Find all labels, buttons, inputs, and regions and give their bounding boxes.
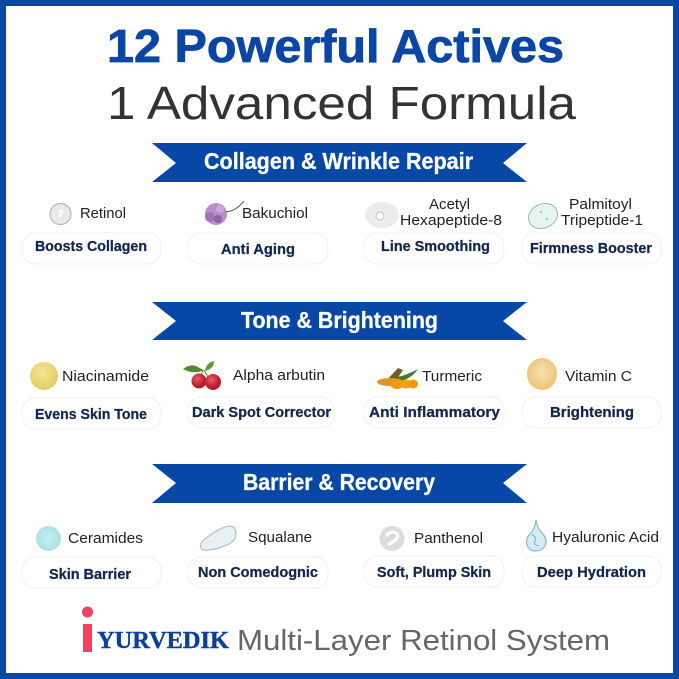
panel: Alpha arbutin: Dark Spot Corrector (192, 405, 331, 421)
footer brand line: Multi-Layer Retinol System (237, 625, 610, 657)
banner: Tone & Brightening (152, 302, 527, 340)
panel: Turmeric: Turmeric (422, 369, 482, 385)
panel: Niacinamide (22, 362, 161, 429)
panel: Panthenol: Panthenol (414, 531, 483, 547)
panel: Alpha arbutin (183, 361, 334, 428)
banner: Collagen & Wrinkle Repair: Collagen & Wrinkle Repair (204, 148, 473, 174)
icon: peptide gel (365, 202, 399, 228)
panel: Squalane: Squalane (248, 530, 312, 546)
icon: squalane smear (200, 526, 236, 550)
icon: ceramide drop (36, 526, 61, 551)
icon: turmeric root (377, 368, 418, 389)
icon: retinol drop (50, 204, 71, 224)
panel: Hyaluronic Acid: Hyaluronic Acid (552, 530, 659, 546)
panel: Niacinamide: Niacinamide (62, 369, 149, 385)
title: 12 Powerful Actives (107, 20, 564, 72)
panel: Retinol: Boosts Collagen (35, 239, 147, 255)
banner: Barrier & Recovery: Barrier & Recovery (243, 469, 435, 495)
banner: Collagen & Wrinkle Repair (152, 143, 527, 182)
panel: Vitamin C (522, 358, 661, 428)
panel: Bakuchiol: Bakuchiol (242, 206, 308, 222)
icon: brand letter i (82, 606, 93, 652)
panel: Panthenol: Soft, Plump Skin (377, 565, 491, 581)
panel: Bakuchiol (188, 201, 328, 264)
panel: Acetyl Hexapeptide-8 (364, 197, 504, 264)
panel: Ceramides (22, 526, 161, 588)
panel: Hyaluronic Acid (522, 520, 661, 587)
panel: Palmitoyl Tripeptide-1: Tripeptide-1 (561, 213, 643, 229)
footer brand line (82, 606, 610, 657)
icon: red berries (183, 361, 221, 390)
icon: tripeptide gel (524, 199, 562, 233)
panel: Panthenol (364, 526, 504, 587)
panel: Acetyl Hexapeptide-8: Hexapeptide-8 (400, 213, 502, 229)
panel: Palmitoyl Tripeptide-1 (522, 197, 661, 264)
panel: Alpha arbutin: Alpha arbutin (233, 368, 325, 384)
icon: bakuchiol flower (205, 201, 244, 225)
icon: vitamin C drop (527, 358, 557, 390)
title: 1 Advanced Formula (107, 77, 576, 129)
title (107, 20, 576, 129)
panel: Turmeric: Anti Inflammatory (369, 405, 500, 421)
banner: Tone & Brightening: Tone & Brightening (241, 307, 438, 333)
panel: Retinol (22, 204, 161, 264)
panel: Hyaluronic Acid: Deep Hydration (537, 565, 646, 581)
panel: Turmeric (364, 368, 504, 428)
panel: Ceramides: Ceramides (68, 531, 143, 547)
icon: panthenol cream (380, 526, 404, 551)
panel: Acetyl Hexapeptide-8: Acetyl (429, 197, 470, 213)
panel: Vitamin C: Brightening (550, 405, 634, 421)
panel: Squalane (188, 526, 328, 588)
icon: hyaluronic droplet (526, 520, 546, 551)
panel: Retinol: Retinol (80, 206, 126, 222)
panel: Ceramides: Skin Barrier (49, 567, 131, 583)
panel: Squalane: Non Comedognic (198, 565, 318, 581)
panel: Bakuchiol: Anti Aging (221, 242, 295, 258)
panel: Palmitoyl Tripeptide-1: Palmitoyl (569, 197, 632, 213)
panel: Vitamin C: Vitamin C (565, 369, 632, 385)
footer brand line: YURVEDIK (97, 628, 229, 654)
panel: Palmitoyl Tripeptide-1: Firmness Booster (530, 241, 652, 257)
icon: niacinamide drop (30, 362, 58, 390)
panel: Niacinamide: Evens Skin Tone (35, 407, 147, 423)
panel: Acetyl Hexapeptide-8: Line Smoothing (381, 239, 490, 255)
banner: Barrier & Recovery (152, 464, 527, 503)
